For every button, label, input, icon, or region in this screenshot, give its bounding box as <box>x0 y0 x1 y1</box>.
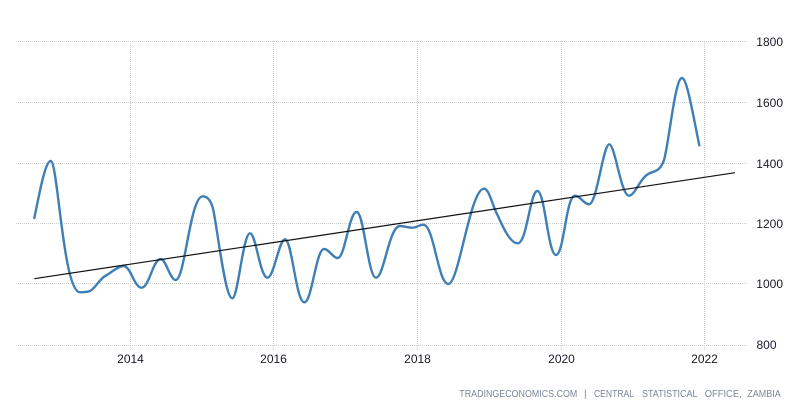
trend line <box>34 173 735 279</box>
source footer: CENTRAL <box>594 389 634 400</box>
x axis labels: 2018 <box>404 352 431 366</box>
source footer: STATISTICAL <box>642 389 698 400</box>
y axis labels: 1600 <box>756 96 783 110</box>
source footer: OFFICE, <box>705 389 742 400</box>
y axis labels: 1200 <box>756 217 783 231</box>
y axis labels: 800 <box>756 338 777 352</box>
x axis labels: 2020 <box>548 352 575 366</box>
source footer: TRADINGECONOMICS.COM <box>459 389 577 400</box>
y axis labels: 1400 <box>756 157 783 171</box>
x axis labels <box>117 352 718 366</box>
y axis labels: 1800 <box>756 35 783 49</box>
x axis labels: 2014 <box>117 352 144 366</box>
source footer <box>459 389 781 400</box>
x axis labels: 2016 <box>260 352 287 366</box>
y axis labels: 1000 <box>756 277 783 291</box>
source footer: | <box>584 389 587 400</box>
data line <box>34 78 699 302</box>
source footer: ZAMBIA <box>747 389 781 400</box>
y axis labels <box>756 35 783 352</box>
x axis labels: 2022 <box>691 352 718 366</box>
